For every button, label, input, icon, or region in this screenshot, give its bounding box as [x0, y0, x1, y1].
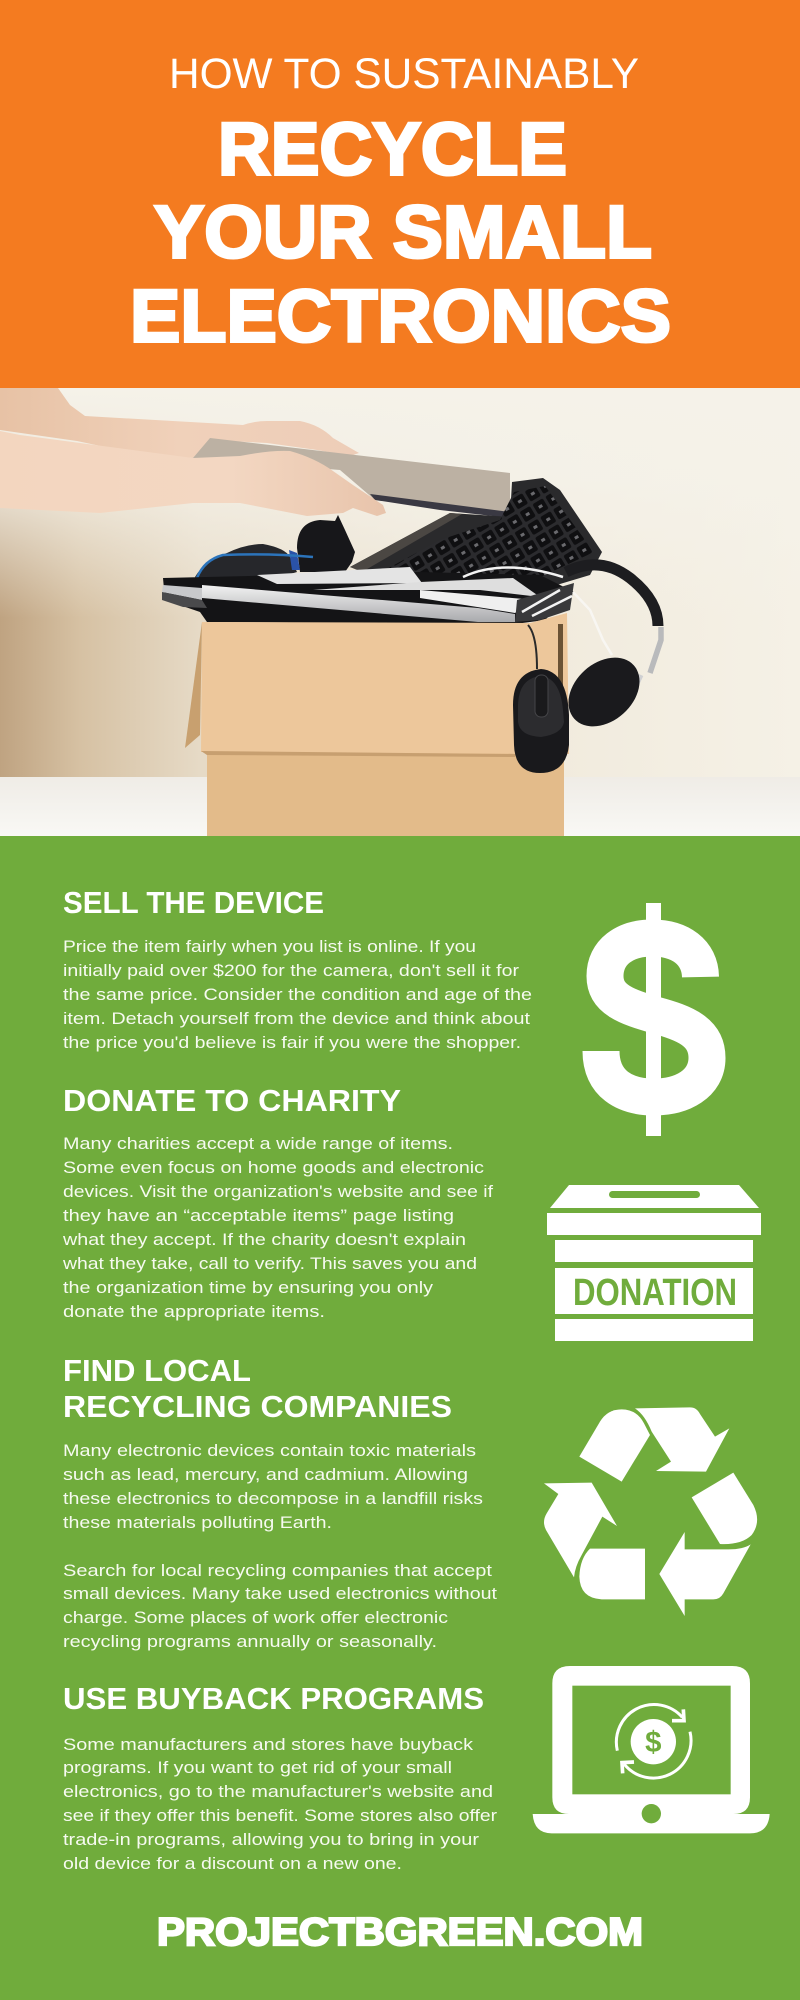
- text block: sell the device: the price you'd believe is fair if you were the shopper.: [63, 1033, 521, 1052]
- mouse: [513, 625, 569, 773]
- text block: donate to charity: devices. Visit the organization's website and see if: [63, 1182, 493, 1201]
- text block: sell the device: initially paid over $200 for the camera, don't sell it for: [63, 961, 519, 980]
- text block: use buyback programs: programs. If you want to get rid of your small: [63, 1758, 452, 1777]
- text block: find local recycling companies: small devices. Many take used electronics without: [63, 1584, 497, 1603]
- panel: header: [0, 0, 800, 388]
- text block: find local recycling companies: Many electronic devices contain toxic materials: [63, 1441, 476, 1460]
- heading: sell the device: SELL THE DEVICE: [63, 885, 324, 920]
- text block: donate to charity: they have an “acceptable items” page listing: [63, 1206, 454, 1225]
- text block: use buyback programs: see if they offer this benefit. Some stores also offer: [63, 1806, 497, 1825]
- text block: donate to charity: what they accept. If the charity doesn't explain: [62, 1230, 466, 1249]
- title: RECYCLE: [218, 108, 567, 190]
- text block: use buyback programs: old device for a discount on a new one.: [63, 1854, 402, 1873]
- black headphones in box: [195, 515, 355, 583]
- text block: find local recycling companies: charge. Some places of work offer electronic: [63, 1608, 449, 1627]
- heading: find local recycling companies: FIND LOCAL: [63, 1353, 251, 1388]
- title: YOUR SMALL: [154, 190, 652, 274]
- footer: website: PROJECTBGREEN.COM: [157, 1911, 643, 1954]
- text block: donate to charity: the organization time by ensuring you only: [63, 1278, 434, 1297]
- text block: find local recycling companies: such as lead, mercury, and cadmium. Allowing: [63, 1465, 468, 1484]
- heading: use buyback programs: USE BUYBACK PROGRAMS: [63, 1681, 484, 1716]
- icon: laptop with rotating dollar: [533, 1666, 770, 1833]
- icon: donation box: DONATION: [573, 1272, 737, 1314]
- text block: sell the device: item. Detach yourself from the device and think about: [63, 1009, 530, 1028]
- keyboard: [350, 478, 602, 590]
- upper arm: [0, 388, 359, 458]
- text block: donate to charity: Some even focus on home goods and electronic: [63, 1158, 485, 1177]
- text block: find local recycling companies: [63, 1441, 497, 1651]
- panel: green content background: [0, 836, 800, 2000]
- title: [130, 50, 671, 358]
- icon: laptop with rotating dollar: $: [645, 1726, 661, 1759]
- text block: donate to charity: Many charities accept a wide range of items.: [63, 1134, 453, 1153]
- text block: sell the device: the same price. Consider the condition and age of the: [63, 985, 532, 1004]
- text block: donate to charity: donate the appropriate items.: [63, 1302, 325, 1321]
- heading: find local recycling companies: [63, 1353, 452, 1424]
- stack of laptops: [162, 567, 574, 624]
- text block: use buyback programs: trade-in programs, allowing you to bring in your: [63, 1830, 479, 1849]
- icon: donation box: [547, 1185, 761, 1341]
- photo: hands placing electronics into a cardboard box: [0, 388, 800, 840]
- text block: find local recycling companies: these electronics to decompose in a landfill risks: [63, 1489, 483, 1508]
- right headphones: [555, 565, 661, 740]
- text block: donate to charity: what they take, call to verify. This saves you and: [62, 1254, 477, 1273]
- laptop held in hands: [193, 438, 510, 518]
- text block: sell the device: [63, 937, 532, 1052]
- cardboard box: [185, 613, 569, 840]
- section: use buyback programs: [63, 1681, 497, 1873]
- section: donate to charity: [62, 1083, 493, 1321]
- text block: find local recycling companies: recycling programs annually or seasonally.: [63, 1632, 437, 1651]
- text block: sell the device: Price the item fairly when you list is online. If you: [63, 937, 476, 956]
- title: HOW TO SUSTAINABLY: [169, 50, 639, 98]
- icon: recycling symbol: [544, 1407, 757, 1616]
- heading: donate to charity: DONATE TO CHARITY: [63, 1083, 401, 1118]
- section: sell the device: [63, 885, 532, 1052]
- text block: use buyback programs: [63, 1735, 497, 1873]
- lower arm: [0, 431, 386, 516]
- icon: dollar sign: [601, 903, 707, 1136]
- section: find local recycling companies: [63, 1353, 497, 1651]
- text block: use buyback programs: Some manufacturers and stores have buyback: [63, 1735, 474, 1754]
- heading: find local recycling companies: RECYCLING COMPANIES: [63, 1389, 452, 1424]
- text block: donate to charity: [62, 1134, 493, 1321]
- text block: use buyback programs: electronics, go to the manufacturer's website and: [63, 1782, 493, 1801]
- text block: find local recycling companies: these materials polluting Earth.: [63, 1513, 332, 1532]
- text block: find local recycling companies: Search for local recycling companies that accept: [63, 1561, 492, 1580]
- title: ELECTRONICS: [130, 274, 671, 358]
